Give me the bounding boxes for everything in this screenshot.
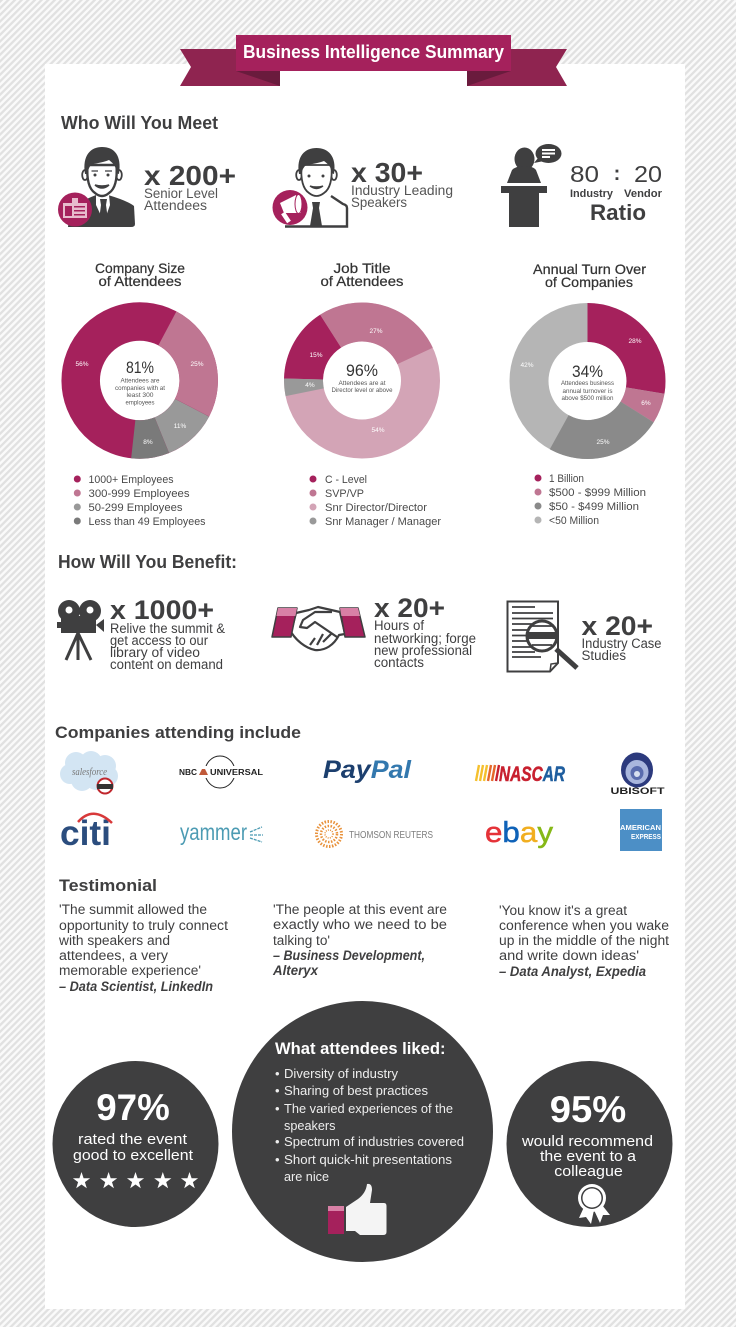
bullet list: Short quick-hit presentations [284, 1152, 452, 1167]
stat: case studies: Industry Case [582, 636, 662, 651]
donut centre text: Attendees are [120, 378, 160, 384]
testimonial 2: exactly who we need to be [273, 917, 447, 932]
circle: what attendees liked: What attendees liked: [275, 1039, 446, 1058]
heading: how will you benefit: How Will You Benefit: [58, 552, 237, 572]
testimonial 1 [58, 902, 228, 994]
stat: senior level attendees: x 200+ [144, 160, 236, 191]
bullet list: The varied experiences of the [284, 1101, 453, 1116]
bullet list [275, 1066, 464, 1184]
legend [534, 473, 646, 527]
stat: video library: get access to our [110, 633, 208, 648]
testimonial 2: talking to' [273, 933, 330, 948]
donut labels: 28% [628, 338, 642, 345]
stat: video library: Relive the summit & [110, 621, 225, 636]
stat: industry vendor ratio: Industry [570, 188, 614, 200]
donut centre text [115, 358, 165, 406]
testimonial 1: opportunity to truly connect [59, 918, 228, 933]
legend: <50 Million [549, 515, 599, 527]
donut centre text: Attendees business [561, 381, 614, 387]
circle: 97% rated: 97% [96, 1087, 170, 1128]
donut centre text: employees [126, 400, 154, 406]
icon: attendee with badge [58, 147, 135, 227]
bullet list: Diversity of industry [284, 1066, 399, 1081]
circle: 95% recommend: 95% [550, 1089, 626, 1130]
donut labels [75, 361, 204, 446]
stat: case studies: x 20+ [582, 611, 653, 641]
testimonial 3: 'You know it's a great [499, 903, 627, 918]
stat: industry vendor ratio: 80 [570, 161, 599, 187]
icon: thumbs up [328, 1184, 386, 1235]
icon: document with magnifier [508, 602, 577, 672]
legend: $50 - $499 Million [549, 501, 639, 513]
logo: Thomson Reuters: THOMSON REUTERS [349, 830, 433, 841]
stat: industry vendor ratio: 20 [634, 161, 662, 187]
heading: who will you meet: Who Will You Meet [61, 113, 218, 133]
donut labels [305, 328, 385, 434]
stat: networking hours: new professional [374, 643, 472, 658]
bullet list: • [275, 1152, 280, 1167]
stat: industry vendor ratio: Vendor [624, 188, 663, 200]
testimonial 1: attendees, a very [59, 948, 168, 963]
legend: 1 Billion [549, 473, 584, 485]
bullet list: Spectrum of industries covered [284, 1134, 464, 1149]
chart title: Company Size [95, 260, 185, 276]
bullet list: are nice [284, 1169, 329, 1184]
donut labels: 4% [305, 382, 315, 389]
stat: networking hours [374, 593, 476, 670]
logo: PayPal: PayPal [323, 756, 412, 784]
legend: 50-299 Employees [88, 502, 183, 514]
icon: five stars [73, 1172, 198, 1188]
circle: 95% recommend [506, 1061, 672, 1227]
stat: industry leading speakers: x 30+ [351, 157, 423, 188]
donut labels: 56% [75, 361, 89, 368]
logo: NBC Universal [179, 756, 263, 788]
circle: 97% rated: rated the event [78, 1131, 188, 1148]
donut labels: 25% [596, 439, 610, 446]
stat: networking hours: Hours of [374, 618, 424, 633]
testimonial 3: conference when you wake [499, 918, 669, 933]
legend: SVP/VP [325, 488, 364, 500]
chart title: Annual Turn Over [533, 261, 646, 277]
legend: Snr Director/Director [325, 502, 427, 514]
stat: senior level attendees [144, 160, 236, 213]
donut centre text: Director level or above [332, 388, 393, 394]
donut centre text: 96% [346, 361, 378, 380]
stat: video library: library of video [110, 645, 200, 660]
circle: 95% recommend: the event to a [540, 1148, 637, 1165]
circle: 95% recommend: would recommend [521, 1133, 653, 1150]
heading: testimonial: Testimonial [59, 876, 157, 895]
donut centre text: above $500 million [562, 396, 614, 402]
legend: C - Level [325, 474, 367, 486]
stat: industry vendor ratio: Ratio [590, 200, 646, 225]
donut labels: 25% [190, 361, 204, 368]
logo: Thomson Reuters [316, 822, 433, 846]
stat: senior level attendees: Attendees [144, 198, 207, 213]
logo: Yammer: yammer [180, 819, 247, 845]
chart panel: job title [281, 260, 443, 528]
icon: handshake [272, 607, 365, 650]
logo: Ubisoft: UBISOFT [610, 786, 665, 797]
chart title: of Companies [545, 274, 633, 290]
chart panel: company size [60, 260, 219, 528]
testimonial 1: – Data Scientist, LinkedIn [59, 979, 213, 994]
donut centre text [561, 362, 614, 402]
logo: Citi: citi [60, 814, 111, 853]
testimonial 2: Alteryx [272, 963, 318, 978]
stat: industry leading speakers: Industry Leading [351, 183, 453, 198]
donut labels: 42% [520, 362, 534, 369]
logo: Ubisoft [610, 752, 665, 797]
donut centre text: annual turnover is [562, 389, 612, 395]
chart title: Job Title [334, 260, 391, 276]
circle: 95% recommend: colleague [554, 1163, 623, 1180]
donut labels: 8% [143, 439, 153, 446]
donut centre text: Attendees are at [338, 381, 386, 387]
circle: 97% rated: good to excellent [73, 1147, 194, 1164]
bullet list: • [275, 1134, 280, 1149]
donut chart [507, 300, 668, 462]
donut labels: 6% [641, 400, 651, 407]
legend: 300-999 Employees [88, 488, 190, 500]
testimonial 1: with speakers and [58, 933, 170, 948]
circle: 97% rated [52, 1061, 218, 1227]
donut labels: 27% [369, 328, 383, 335]
testimonial 3: up in the middle of the night [499, 933, 669, 948]
testimonial 3: and write down ideas' [499, 948, 639, 963]
donut centre text: least 300 [126, 393, 154, 399]
donut labels: 15% [309, 352, 323, 359]
testimonial 3: – Data Analyst, Expedia [499, 964, 646, 979]
testimonial 3 [499, 903, 669, 979]
donut centre text: 34% [572, 362, 603, 381]
logo: American Express [620, 809, 662, 851]
title: Business Intelligence Summary [243, 42, 504, 62]
testimonial 2: 'The people at this event are [273, 902, 447, 917]
icon: film camera [57, 600, 104, 660]
stat: networking hours: x 20+ [374, 593, 445, 623]
stat: industry vendor ratio [570, 161, 663, 225]
chart panel: annual turnover [507, 261, 668, 527]
logo: NASCAR: NASCAR [499, 763, 566, 786]
stat: industry vendor ratio: : [614, 163, 620, 185]
donut chart [281, 300, 443, 461]
stat: video library: x 1000+ [110, 595, 214, 625]
logo: NBC Universal: UNIVERSAL [210, 768, 263, 777]
icon: podium speaker [501, 144, 562, 227]
icon: speaker with megaphone [272, 148, 347, 226]
donut centre text: companies with at [115, 386, 165, 392]
donut centre text: 81% [126, 358, 154, 377]
legend: Snr Manager / Manager [325, 516, 441, 528]
chart title: of Attendees [98, 273, 182, 289]
donut labels [520, 338, 651, 446]
legend: $500 - $999 Million [549, 487, 646, 499]
bullet list: • [275, 1066, 280, 1081]
stat: video library: content on demand [110, 657, 223, 672]
bullet list: Sharing of best practices [284, 1083, 429, 1098]
logo: American Express: AMERICAN [620, 823, 661, 832]
donut labels: 11% [174, 423, 186, 430]
bullet list: • [275, 1101, 280, 1116]
stat: industry leading speakers [351, 157, 453, 210]
donut chart [60, 301, 219, 460]
stat: case studies: Studies [582, 648, 626, 663]
testimonial 1: memorable experience' [59, 963, 201, 978]
circle: what attendees liked [232, 1001, 493, 1262]
logo: NBC Universal: NBC [179, 768, 197, 777]
legend: 1000+ Employees [88, 474, 174, 486]
legend [74, 474, 206, 528]
icon: award rosette [578, 1184, 610, 1224]
testimonial 1: 'The summit allowed the [59, 902, 207, 917]
title ribbon [180, 35, 567, 86]
stat: case studies [582, 611, 662, 663]
logo: American Express: EXPRESS [631, 832, 661, 841]
logo: NASCAR [476, 763, 566, 786]
donut centre text [332, 361, 393, 394]
chart title: of Attendees [320, 273, 404, 289]
testimonial 2 [272, 902, 447, 978]
donut labels: 54% [371, 427, 385, 434]
stat: senior level attendees: Senior Level [144, 186, 218, 201]
heading: companies attending: Companies attending include [55, 723, 301, 742]
bullet list: • [275, 1083, 280, 1098]
stat: industry leading speakers: Speakers [351, 195, 407, 210]
legend [310, 474, 441, 528]
stat: networking hours: contacts [374, 655, 424, 670]
stat: networking hours: networking; forge [374, 631, 476, 646]
testimonial 2: – Business Development, [273, 948, 425, 963]
bullet list: speakers [284, 1118, 336, 1133]
logo: eBay: ebay [485, 817, 554, 849]
logo: salesforce: salesforce [72, 766, 107, 778]
stat: video library [110, 595, 225, 672]
legend: Less than 49 Employees [88, 516, 206, 528]
logo: salesforce [60, 751, 118, 794]
